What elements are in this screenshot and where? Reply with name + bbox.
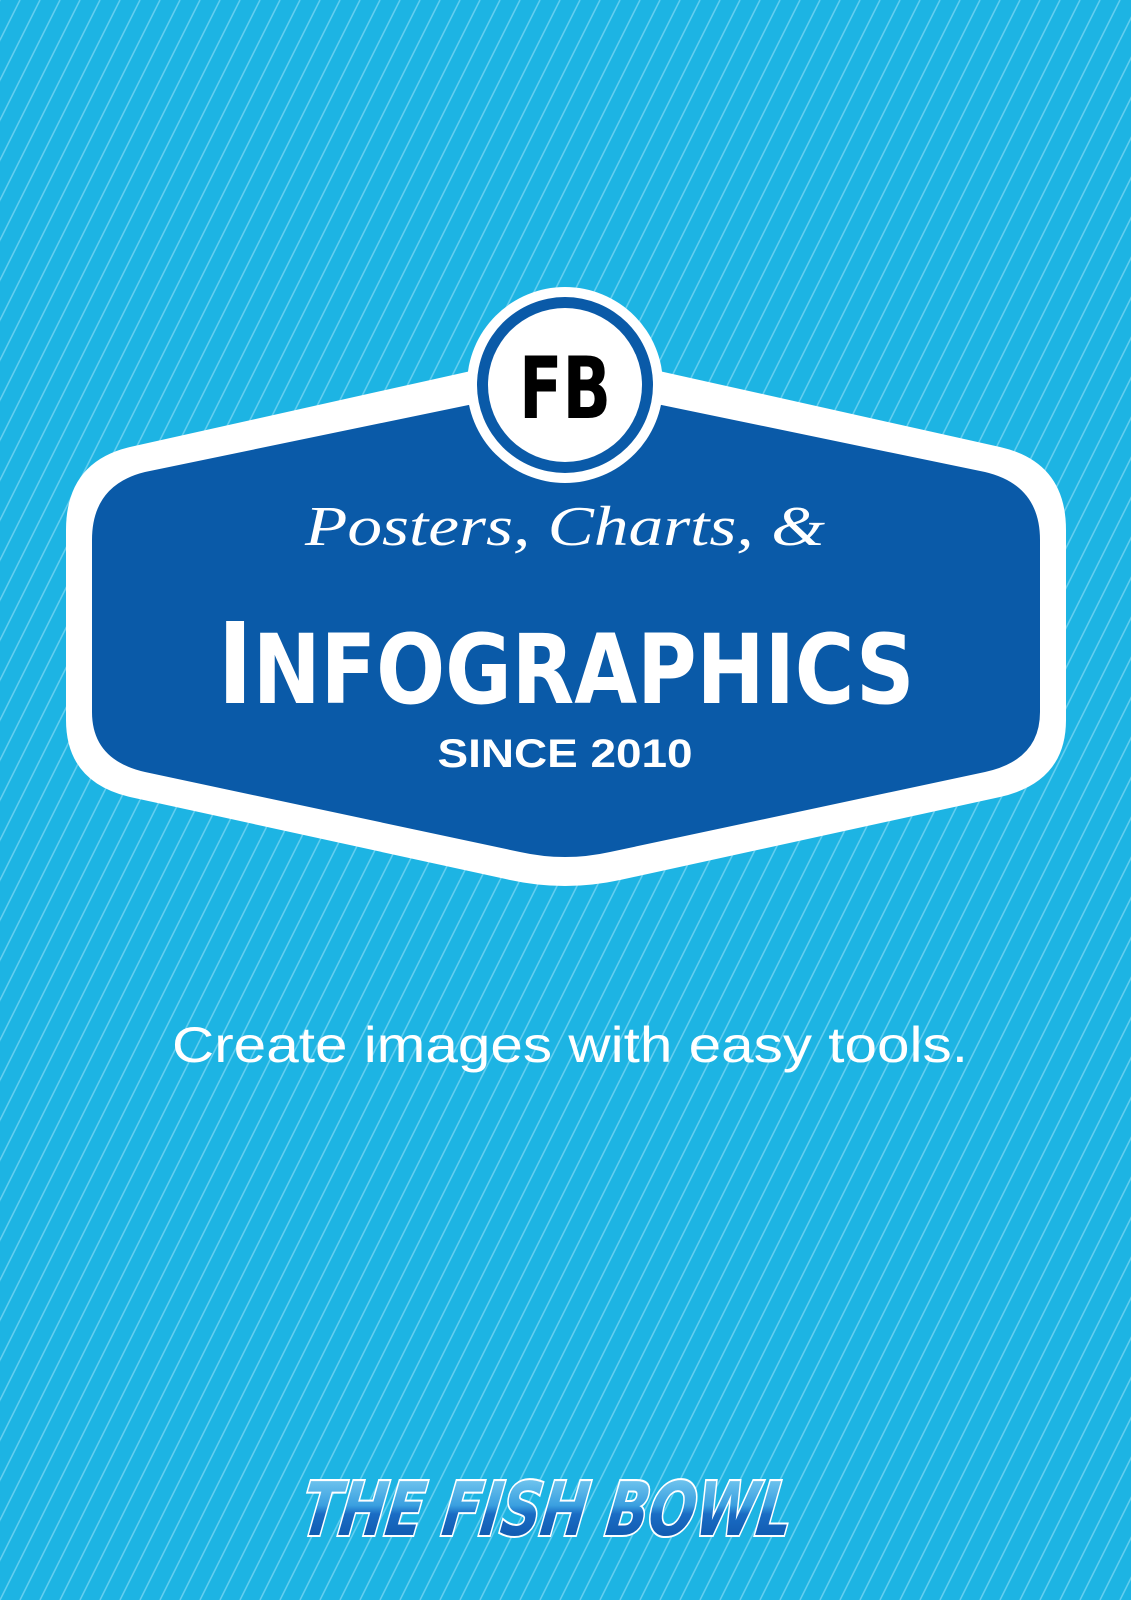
since 2010: SINCE 2010: [438, 732, 692, 776]
icon: FB circle: FB: [519, 339, 611, 439]
heading: infographics: INFOGRAPHICS: [218, 600, 914, 730]
logo: the fish bowl: THE FISH BOWL: [297, 1466, 799, 1553]
icon: FB circle: [467, 287, 663, 483]
tagline: Create images with easy tools.: [172, 1017, 968, 1073]
badge: [66, 287, 1066, 886]
subtitle script: Posters, Charts, &: [304, 496, 826, 558]
